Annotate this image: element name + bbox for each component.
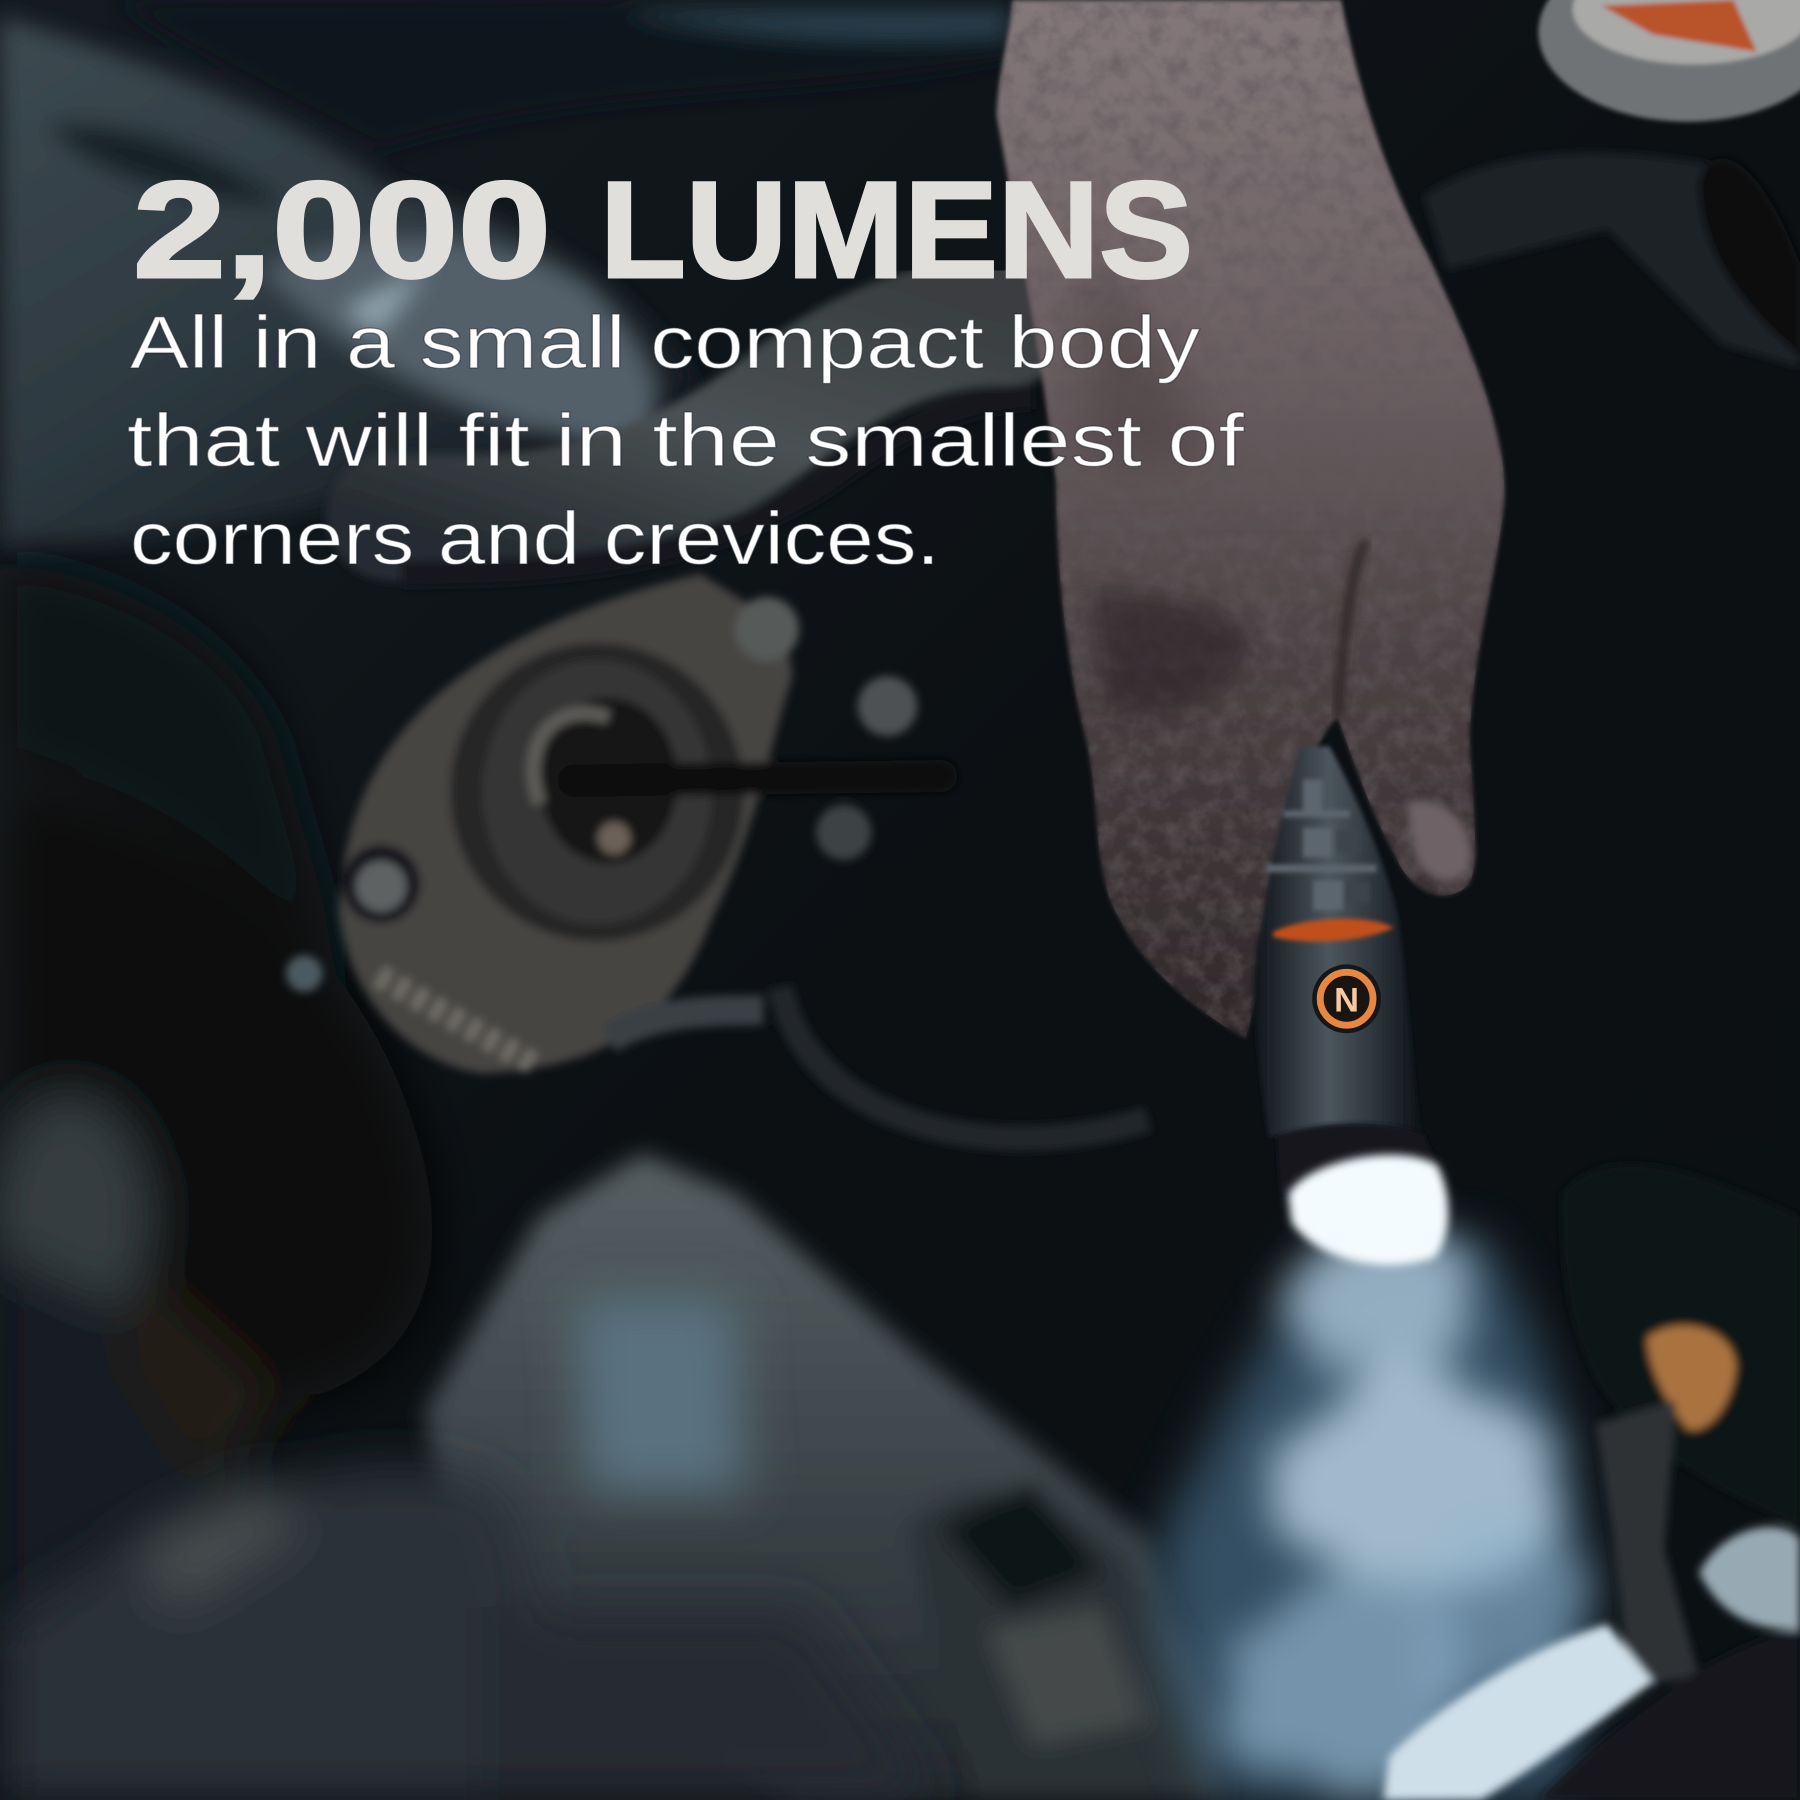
corrugated hoses [1424, 152, 1800, 367]
lower blurred engine block [425, 1154, 1228, 1800]
lower right parts [1383, 1164, 1800, 1800]
top engine cover [0, 0, 1010, 551]
orange band [1273, 919, 1394, 942]
body text [127, 301, 1245, 580]
foreground blurred shapes [0, 1297, 941, 1800]
small blurred highlight [286, 955, 323, 992]
radiator cap [1538, 0, 1800, 122]
power button logo [1312, 964, 1381, 1033]
heading: 2,000 LUMENS [133, 154, 1193, 307]
mounting bracket with bolts [339, 574, 1148, 1138]
hand [996, 0, 1504, 1039]
power button logo: N [1334, 981, 1359, 1019]
knurled grip blocks [1266, 779, 1376, 910]
bezel [1277, 1123, 1441, 1194]
line 3: corners and crevices. [130, 497, 940, 580]
heading word: LUMENS [600, 154, 1193, 307]
line 2: that will fit in the smallest of [127, 399, 1245, 482]
ribbed hose [390, 321, 1033, 574]
line 1: All in a small compact body [130, 301, 1200, 384]
heading number: 2,000 [133, 154, 551, 307]
left dark hose shape [0, 563, 433, 1653]
lens glow [1288, 1155, 1448, 1265]
flashlight [1254, 746, 1441, 1194]
light beam and smoke [1157, 1155, 1586, 1800]
